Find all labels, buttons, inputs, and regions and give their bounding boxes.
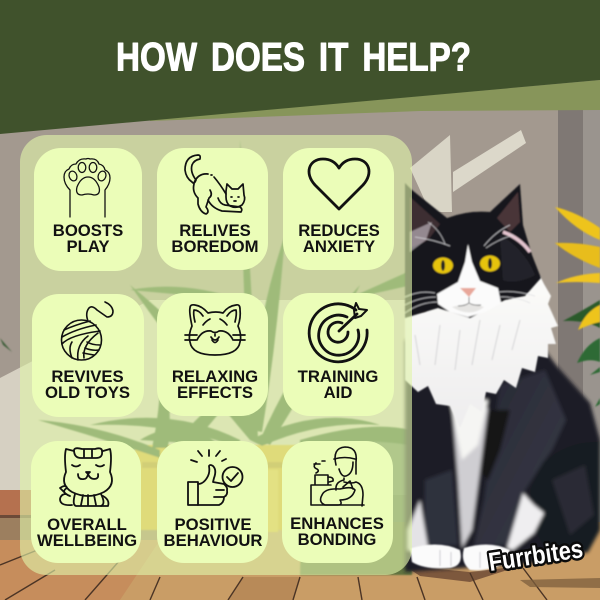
header band bbox=[0, 0, 600, 134]
label: RELIVES bbox=[179, 221, 251, 240]
icon: yarn ball bbox=[62, 302, 113, 360]
card: training aid bbox=[283, 293, 394, 416]
label: POSITIVE bbox=[175, 515, 251, 534]
label: WELLBEING bbox=[37, 531, 137, 550]
cat illustration bbox=[405, 183, 600, 572]
label: AID bbox=[324, 383, 352, 402]
logo: Furrbites: Furrbites bbox=[486, 533, 585, 577]
icon: stretching cat bbox=[185, 155, 245, 214]
card: positive behaviour bbox=[157, 441, 268, 563]
icon: person holding cat bbox=[311, 447, 364, 506]
label: ANXIETY bbox=[303, 237, 375, 256]
icon: relaxed cat face bbox=[185, 305, 245, 355]
panel: translucent benefits panel bbox=[20, 135, 412, 575]
ears bbox=[410, 197, 440, 248]
label: OVERALL bbox=[47, 515, 127, 534]
label: EFFECTS bbox=[177, 383, 253, 402]
plant and pot behind panel bbox=[0, 140, 412, 575]
label: BOOSTS bbox=[53, 221, 123, 240]
card: enhances bonding bbox=[282, 441, 393, 563]
label: PLAY bbox=[67, 237, 109, 256]
card: relaxing effects bbox=[157, 293, 268, 416]
icon: thumbs up with check bbox=[188, 450, 242, 505]
card: relives boredom bbox=[157, 148, 268, 270]
whiskers bbox=[405, 222, 535, 313]
card: overall wellbeing bbox=[31, 441, 141, 563]
label: BOREDOM bbox=[171, 237, 259, 256]
label: REVIVES bbox=[51, 367, 124, 386]
icon: target and arrow bbox=[309, 303, 367, 362]
label: TRAINING bbox=[298, 367, 378, 386]
label: BEHAVIOUR bbox=[164, 531, 262, 550]
label: OLD TOYS bbox=[45, 383, 130, 402]
label: REDUCES bbox=[298, 221, 380, 240]
white ruff bbox=[405, 276, 558, 428]
facial white bbox=[437, 244, 501, 317]
title: HOW DOES IT HELP? bbox=[116, 35, 471, 79]
card: boosts play bbox=[34, 148, 142, 271]
yellow and green leaves bbox=[555, 207, 600, 407]
eyes bbox=[433, 258, 453, 274]
card: reduces anxiety bbox=[283, 148, 394, 270]
icon: cat with bow bbox=[60, 448, 112, 506]
label: BONDING bbox=[298, 530, 376, 549]
nose and mouth bbox=[460, 288, 476, 297]
cat body bbox=[405, 330, 600, 572]
label: ENHANCES bbox=[290, 514, 384, 533]
icon: paw bbox=[64, 158, 110, 217]
head bbox=[405, 183, 541, 318]
icon: heart bbox=[309, 159, 369, 209]
chest stripe bbox=[452, 405, 488, 548]
card: revives old toys bbox=[32, 294, 144, 417]
haunch white bbox=[507, 493, 544, 550]
label: RELAXING bbox=[172, 367, 258, 386]
paws bbox=[410, 544, 510, 570]
